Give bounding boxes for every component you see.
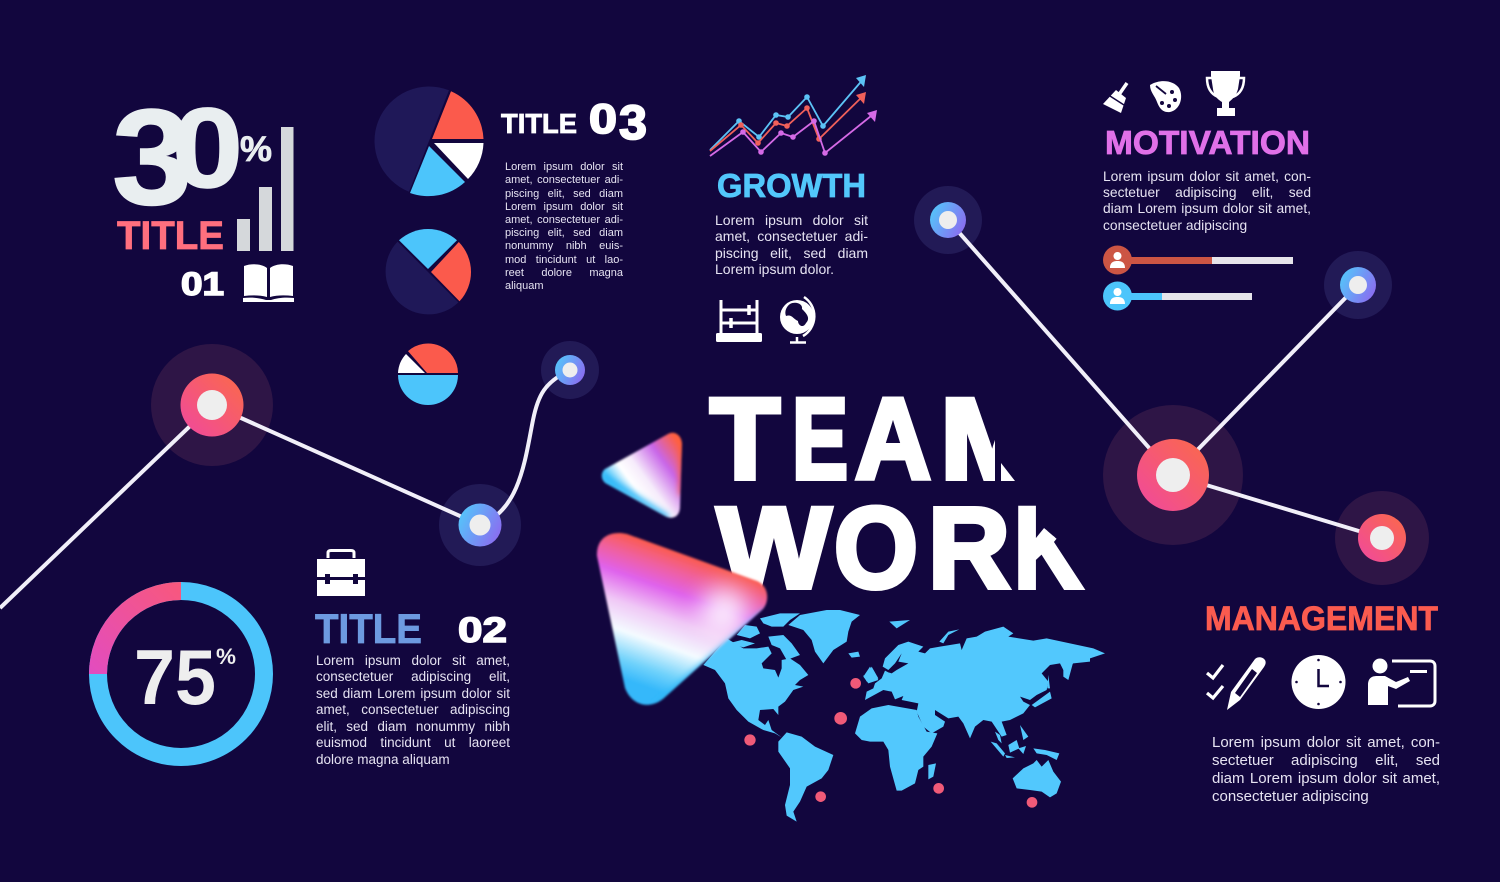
- text block: title 03 paragraph: Lorem ipsum dolor sit: [505, 201, 623, 213]
- icon: trophy: [1207, 71, 1244, 116]
- connector right: lines and nodes: [914, 186, 1429, 585]
- heading: title 02: TITLE: [315, 605, 422, 652]
- stat block: 30% title 01: [112, 81, 294, 302]
- text block: growth paragraph: amet, consectetuer adi-: [715, 228, 868, 244]
- text block: title 02 paragraph: sed diam Lorem ipsum dolor sit: [316, 686, 510, 701]
- heading: growth: GROWTH: [717, 167, 866, 204]
- text block: management paragraph: consectetuer adipiscing: [1212, 788, 1369, 805]
- node: large warm: [180, 374, 244, 436]
- node: top right cool: [1340, 267, 1376, 303]
- gradient triangle: large: [595, 531, 769, 706]
- donut chart 75 percent: [98, 591, 264, 757]
- text block: title 03 paragraph: mod tincidunt ut lao-: [505, 254, 623, 266]
- text block: title 02 paragraph: elit, sed diam nonummy nibh: [316, 719, 510, 734]
- title: team work: W: [717, 484, 831, 612]
- big number 30 percent: %: [240, 130, 272, 169]
- text block: management paragraph: Lorem ipsum dolor sit amet, con-: [1212, 734, 1440, 751]
- text block: title 02 paragraph: dolore magna aliquam: [316, 752, 450, 767]
- icon: briefcase: [317, 550, 365, 596]
- text block: title 03 paragraph: amet, consectetuer adi-: [505, 214, 623, 226]
- icon: broom: [1103, 83, 1127, 113]
- pie charts: [374, 86, 484, 405]
- big number 30 percent: 3: [112, 81, 192, 233]
- text block: motivation paragraph: Lorem ipsum dolor sit amet, con-: [1103, 168, 1311, 184]
- text block: title 03 paragraph: [505, 161, 623, 292]
- title: team work: T: [710, 376, 780, 504]
- big number 30 percent: 0: [172, 85, 243, 211]
- big number 30 percent: [112, 81, 272, 233]
- title: team work: A: [855, 376, 931, 504]
- heading: title: TITLE: [117, 214, 224, 258]
- line chart: growth: [710, 75, 877, 156]
- text block: title 03 paragraph: aliquam: [505, 280, 544, 292]
- title: team work: K: [1014, 484, 1082, 612]
- text block: growth paragraph: piscing elit, sed diam: [715, 245, 868, 261]
- number 01: 01: [181, 266, 224, 302]
- text block: growth paragraph: Lorem ipsum dolor sit: [715, 212, 868, 228]
- donut chart 75 percent: 75: [134, 633, 216, 721]
- text block: title 02 paragraph: amet, consectetuer adipiscing: [316, 702, 510, 717]
- world map: [703, 610, 1105, 822]
- node halos: [914, 186, 1429, 585]
- text block: motivation paragraph: [1103, 168, 1311, 233]
- text block: title 02 paragraph: Lorem ipsum dolor sit amet,: [316, 653, 510, 668]
- heading: title 03: 3: [619, 97, 647, 150]
- text block: title 02 paragraph: euismod tincidunt ut laoreet: [316, 735, 510, 750]
- title: team work: O: [834, 484, 918, 612]
- icon: clock: [1292, 655, 1346, 709]
- node: bottom right warm: [1358, 514, 1406, 562]
- text block: title 02 paragraph: consectetuer adipiscing elit,: [316, 669, 510, 684]
- text block: motivation paragraph: consectetuer adipiscing: [1103, 218, 1247, 233]
- gradient triangle: small: [600, 431, 684, 520]
- text block: title 03 paragraph: amet, consectetuer adi-: [505, 174, 623, 186]
- title: team work: E: [792, 376, 848, 504]
- pie chart: small: [398, 343, 458, 405]
- text block: title 03 paragraph: nonummy nibh euis-: [505, 240, 623, 252]
- bar chart: rising bars: [237, 127, 294, 251]
- title: team work: R: [928, 484, 1010, 612]
- progress bar: red: [1103, 246, 1293, 274]
- heading: title 03: TITLE: [501, 108, 577, 139]
- heading: motivation: MOTIVATION: [1105, 124, 1310, 161]
- text block: title 03 paragraph: piscing elit, sed diam: [505, 227, 623, 239]
- node: top left cool: [930, 202, 966, 238]
- node: medium cool: [458, 504, 502, 546]
- text block: motivation paragraph: sectetuer adipiscing elit, sed: [1103, 185, 1311, 200]
- icon: abacus: [716, 300, 762, 342]
- icon: globe: [780, 297, 814, 342]
- line path: [0, 370, 570, 608]
- text block: growth paragraph: Lorem ipsum dolor.: [715, 261, 834, 277]
- title: team work: [708, 396, 1086, 591]
- americas and greenland: [703, 610, 878, 822]
- pie chart: large: [374, 86, 484, 196]
- heading: management: MANAGEMENT: [1205, 600, 1438, 638]
- text block: title 03 paragraph: piscing elit, sed diam: [505, 188, 623, 200]
- text block: management paragraph: [1212, 734, 1440, 805]
- text block: growth paragraph: [715, 212, 868, 277]
- text block: title 03 paragraph: reet dolore magna: [505, 267, 623, 279]
- icon: checklist and pencil: [1207, 657, 1266, 710]
- eurasia africa australia: [855, 620, 1105, 797]
- donut chart 75 percent: %: [216, 644, 236, 669]
- text block: management paragraph: diam Lorem ipsum dolor sit amet,: [1212, 770, 1440, 787]
- heading: title 02: [315, 605, 507, 652]
- heading: title 03: 0: [589, 95, 617, 142]
- icon: paint palette: [1150, 81, 1181, 112]
- node: small cool: [555, 355, 585, 385]
- connector left: line and nodes: [0, 341, 599, 608]
- icon: open book: [243, 264, 294, 302]
- heading: title 03: [501, 95, 647, 150]
- text block: motivation paragraph: diam Lorem ipsum dolor sit amet,: [1103, 201, 1311, 216]
- icon: presenter at board: [1368, 658, 1435, 706]
- progress bar: blue: [1103, 282, 1252, 310]
- text block: management paragraph: sectetuer adipiscing elit, sed: [1212, 752, 1440, 769]
- pie chart: medium: [386, 229, 471, 314]
- text block: title 03 paragraph: Lorem ipsum dolor sit: [505, 161, 623, 173]
- heading: title 02: 02: [458, 611, 507, 650]
- lines: [948, 220, 1382, 538]
- title: team work: M: [940, 376, 1044, 504]
- text block: title 02 paragraph: [316, 653, 510, 767]
- node halos: [151, 341, 599, 566]
- node: hub warm: [1137, 439, 1209, 511]
- location dots: [744, 678, 1037, 808]
